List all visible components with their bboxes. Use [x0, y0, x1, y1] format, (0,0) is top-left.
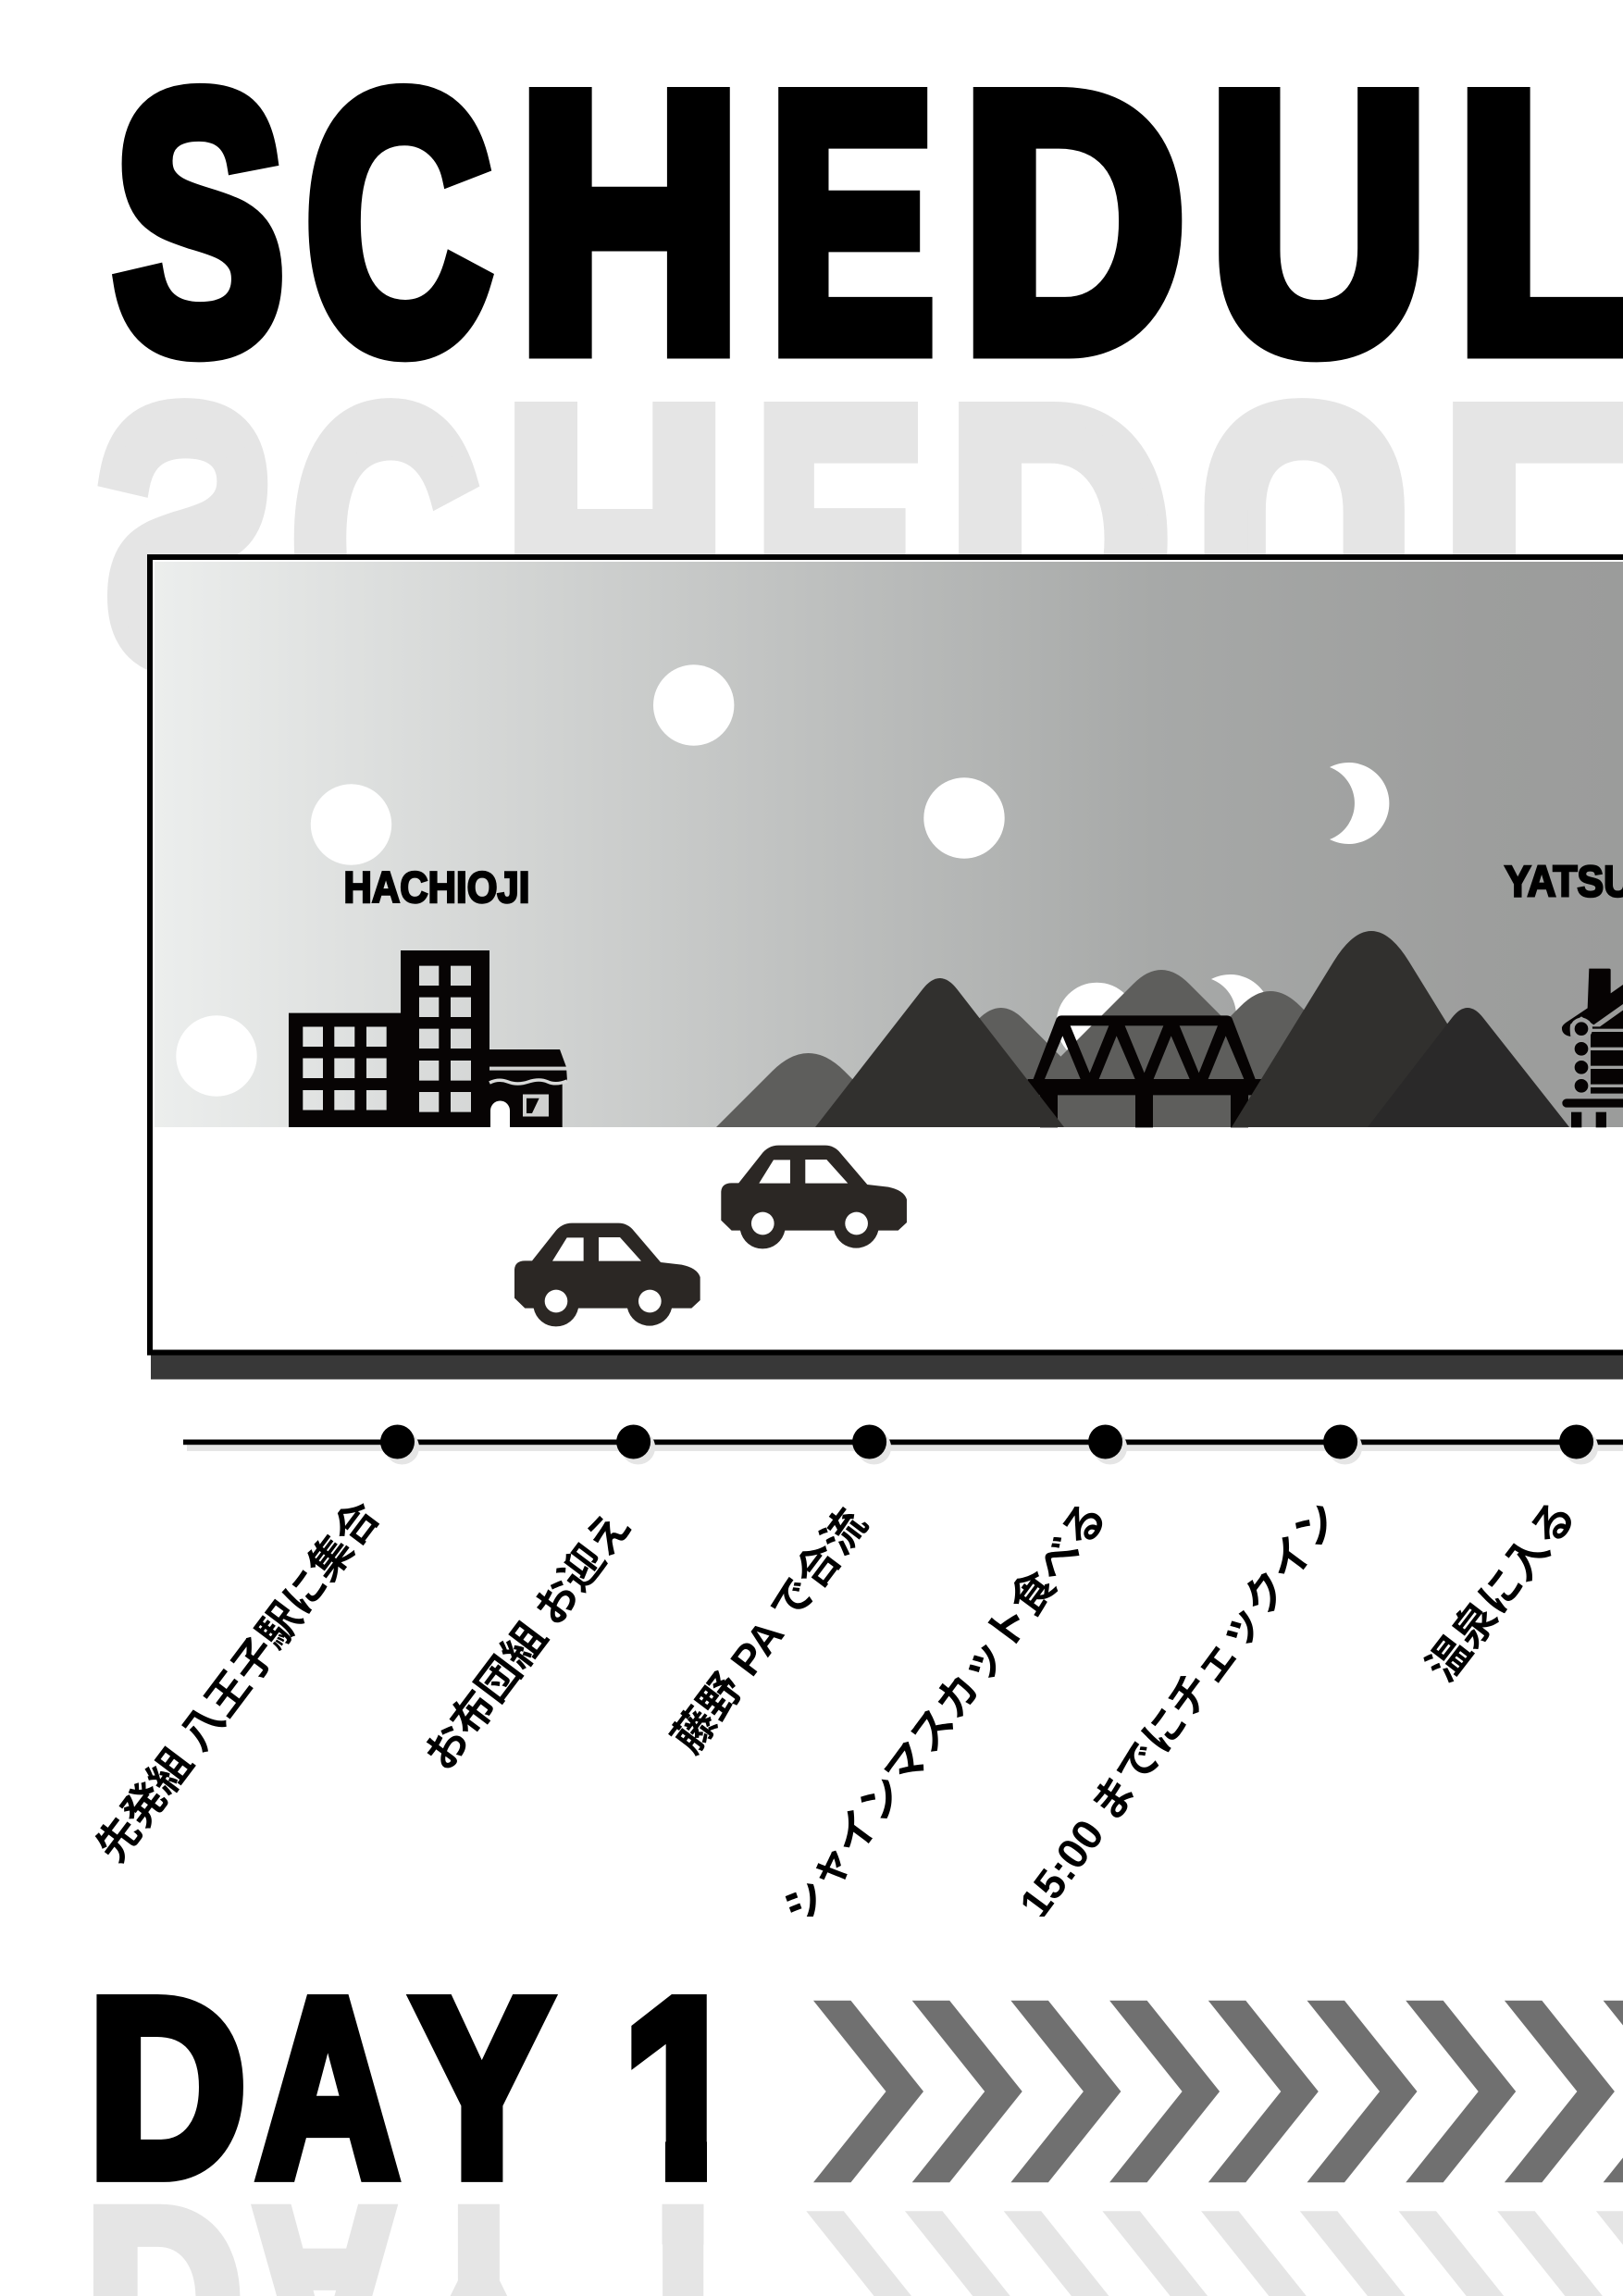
label: pick up futon group: お布団組 お迎え — [415, 1502, 640, 1779]
title: C — [305, 19, 491, 426]
icon: shop — [475, 1049, 567, 1127]
day heading: Y — [413, 1947, 551, 2228]
title reflection: E — [754, 334, 921, 740]
day heading: A — [257, 1947, 399, 2228]
title reflection: S — [99, 334, 270, 740]
chevron arrows reflection — [806, 2211, 1623, 2296]
label: HACHIOJI: HACHIOJI — [344, 863, 529, 912]
day heading — [89, 1947, 768, 2228]
day heading: D — [89, 1947, 246, 2228]
sky gradient — [155, 562, 1623, 1127]
title reflection: D — [947, 334, 1171, 740]
back mountains — [716, 970, 1421, 1127]
label: eat Shine Muscat: シャインマスカット食べる — [774, 1494, 1116, 1932]
timeline — [183, 1425, 1623, 1464]
icon: truss bridge — [1028, 1015, 1263, 1127]
title reflection: C — [291, 334, 477, 740]
icon: car lower — [514, 1223, 700, 1326]
label: check in by 15:00: 15:00 までにチェックイン — [1010, 1494, 1348, 1927]
label: meet at Hachioji station: 先発組 八王子駅に集合 — [87, 1492, 389, 1870]
title — [114, 19, 1623, 426]
panel frame — [150, 557, 1623, 1353]
moon phases — [176, 664, 1389, 1097]
front mountains — [815, 931, 1569, 1127]
title reflection: H — [502, 334, 727, 740]
schedule labels — [87, 1492, 1585, 1932]
icon: log cabin — [1562, 969, 1623, 1127]
title: S — [114, 19, 285, 426]
title reflection: U — [1195, 334, 1414, 740]
title: U — [1209, 19, 1429, 426]
title reflection — [99, 334, 1623, 740]
title: D — [961, 19, 1186, 426]
title: H — [517, 19, 742, 426]
panel: route scene — [150, 557, 1623, 1379]
day heading: 1 — [624, 1947, 739, 2228]
panel drop shadow — [151, 1355, 1623, 1379]
label: meet at Fujino PA: 藤野 PA で合流 — [663, 1500, 876, 1762]
chevron arrows — [813, 2001, 1623, 2182]
day heading reflection — [93, 2204, 703, 2296]
title: E — [769, 19, 935, 426]
icon: car upper — [721, 1146, 907, 1248]
label: take a hot spring bath: 温泉に入る — [1417, 1492, 1585, 1690]
icon: city buildings — [289, 950, 567, 1127]
